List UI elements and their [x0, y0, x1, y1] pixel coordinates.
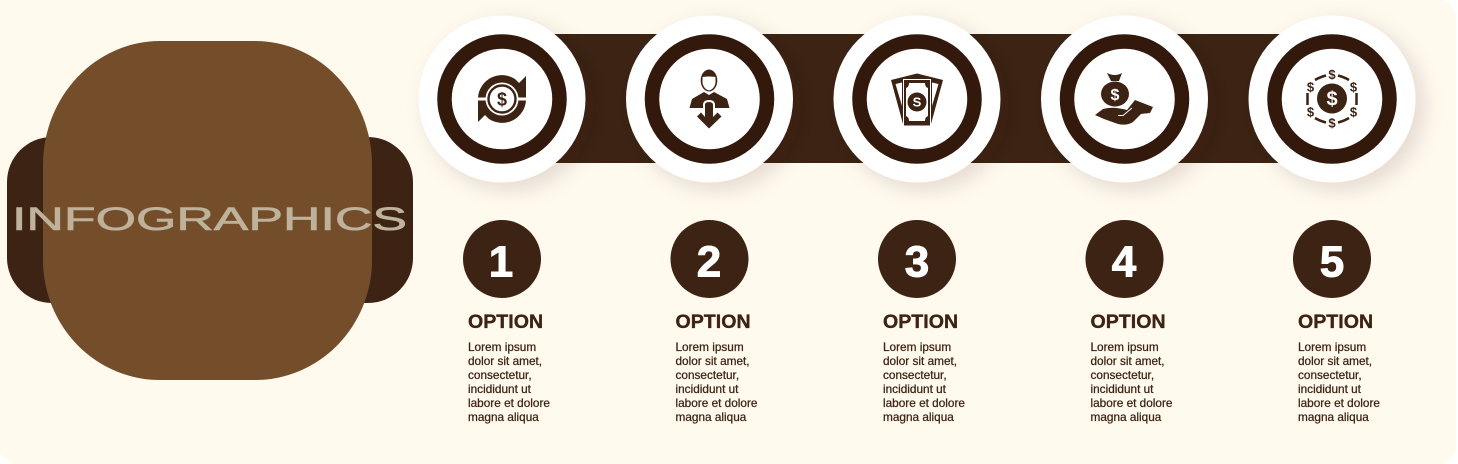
circle 5 with coins icon [1248, 16, 1416, 182]
step 5: dolor sit amet, [1298, 354, 1372, 368]
icon: coin ring: $ [1350, 80, 1358, 94]
step 4: dolor sit amet, [1090, 354, 1165, 368]
icon: coin ring: $ [1307, 104, 1315, 120]
step 5: incididunt ut [1298, 382, 1362, 396]
icon: coin ring: $ [1350, 104, 1358, 120]
step 3: OPTION [883, 311, 958, 333]
step 2 [670, 220, 758, 424]
step 5: 5 [1320, 238, 1344, 286]
circle 2 with person icon [626, 16, 793, 182]
step 5: OPTION [1298, 311, 1373, 333]
step 2: Lorem ipsum [676, 340, 744, 354]
icon: money bag on hand: $ [1111, 87, 1120, 104]
step 3: magna aliqua [883, 410, 954, 424]
icon: money exchange [478, 75, 526, 123]
circle 3 with banknotes icon [834, 16, 1000, 182]
step 1: consectetur, [468, 368, 532, 382]
title: INFOGRAPHICS [12, 201, 407, 237]
step 4: consectetur, [1090, 368, 1154, 382]
step 3: dolor sit amet, [883, 354, 957, 368]
step 1: labore et dolore [468, 396, 550, 410]
step 5: consectetur, [1298, 368, 1362, 382]
icon: money bag on hand [1095, 73, 1153, 125]
step 5: magna aliqua [1298, 410, 1369, 424]
step 3: Lorem ipsum [883, 340, 951, 354]
step 5 [1293, 220, 1380, 424]
step 1 [463, 220, 550, 424]
step 2: 2 [697, 238, 721, 286]
step 5: Lorem ipsum [1298, 340, 1366, 354]
step 4: 4 [1112, 238, 1137, 286]
dark backing shape [7, 137, 413, 303]
step 4: magna aliqua [1090, 410, 1162, 424]
step 4: incididunt ut [1090, 382, 1154, 396]
step 4: Lorem ipsum [1090, 340, 1159, 354]
step 2: dolor sit amet, [676, 354, 750, 368]
step 2: incididunt ut [676, 382, 739, 396]
connector band [502, 34, 1332, 163]
step 1: dolor sit amet, [468, 354, 542, 368]
step 2: OPTION [676, 311, 751, 333]
step 4: OPTION [1090, 311, 1166, 333]
icon: banknotes [891, 74, 943, 126]
icon: banknotes: S [913, 94, 922, 110]
step 2: consectetur, [676, 368, 739, 382]
step 1: OPTION [468, 311, 543, 333]
icon: coin ring: $ [1328, 116, 1336, 130]
step 4 [1086, 220, 1173, 424]
step 3 [878, 220, 965, 424]
icon: money exchange: $ [497, 90, 507, 110]
step 2: labore et dolore [676, 396, 758, 410]
icon: coin ring: $ [1328, 67, 1336, 82]
icon: coin ring [1307, 67, 1358, 130]
icon: person with down arrow [690, 70, 730, 128]
step 1: magna aliqua [468, 410, 539, 424]
brown rounded panel [43, 41, 372, 380]
step 1: 1 [489, 238, 513, 286]
step 1: incididunt ut [468, 382, 532, 396]
circle 1 with exchange icon [418, 16, 586, 182]
step 5: labore et dolore [1298, 396, 1380, 410]
step 4: labore et dolore [1090, 396, 1173, 410]
left title block [7, 41, 413, 380]
step 3: labore et dolore [883, 396, 965, 410]
icon: coin ring: $ [1326, 88, 1338, 110]
step 2: magna aliqua [676, 410, 747, 424]
step 3: 3 [905, 238, 929, 286]
circle 4 with money bag icon [1041, 16, 1208, 182]
icon: coin ring: $ [1307, 80, 1315, 94]
step 3: consectetur, [883, 368, 947, 382]
step 1: Lorem ipsum [468, 340, 536, 354]
step 3: incididunt ut [883, 382, 947, 396]
